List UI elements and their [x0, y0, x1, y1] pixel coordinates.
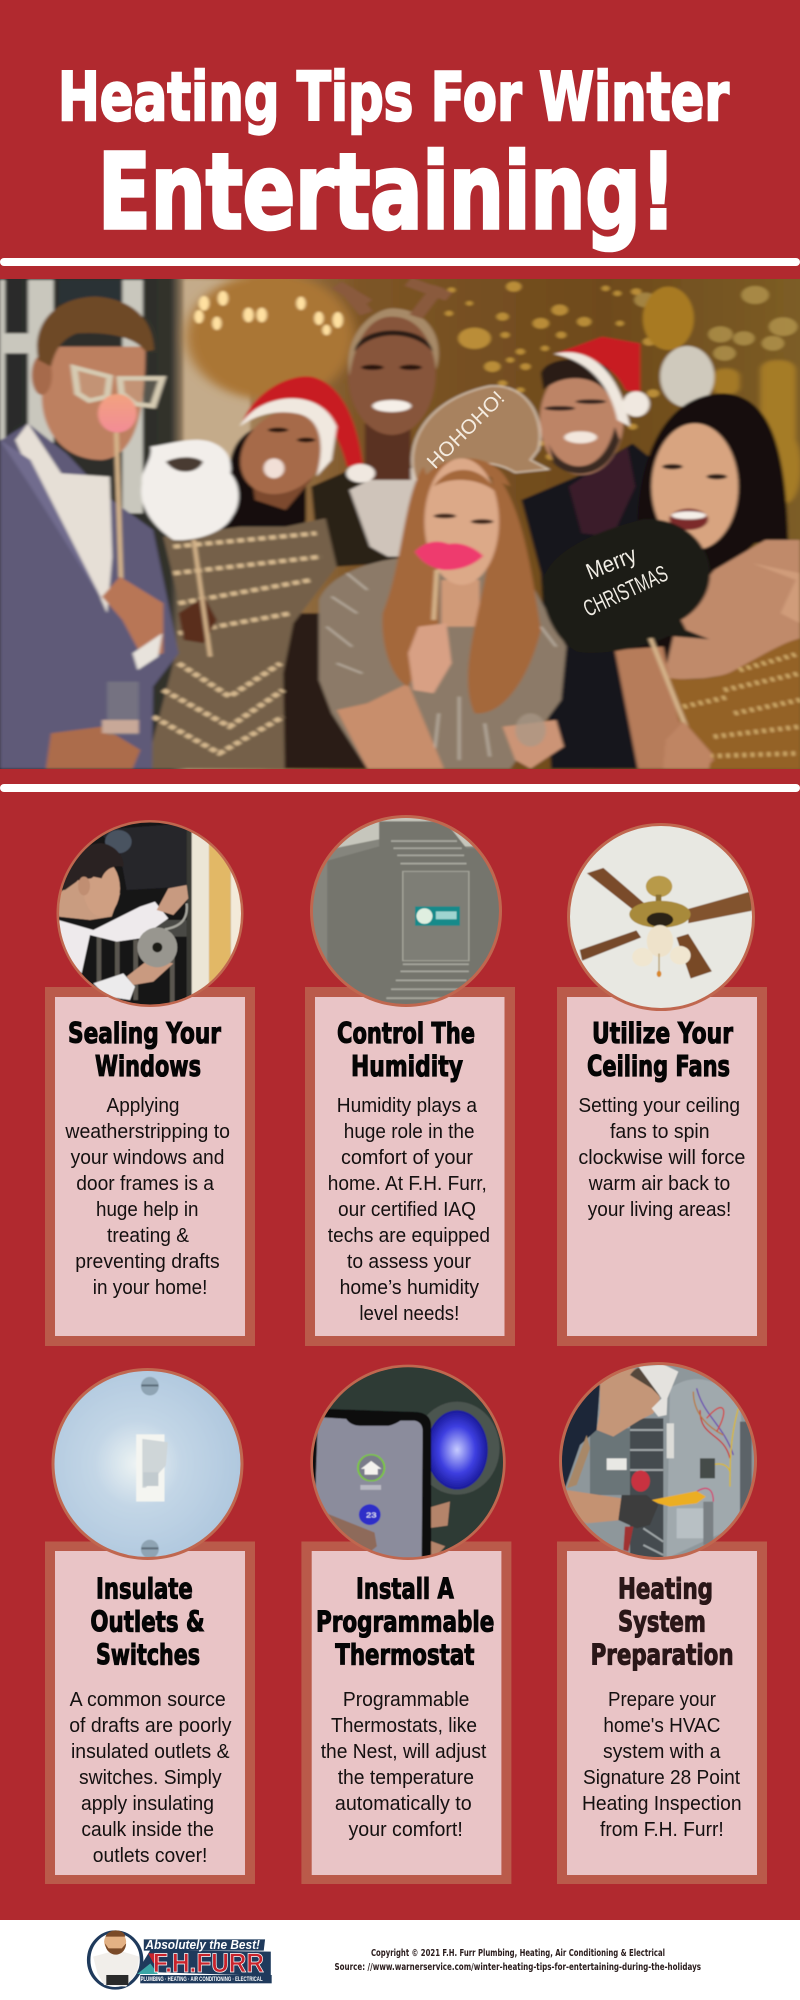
photo: ceiling fan [563, 821, 761, 1014]
blonde woman with lip prop [319, 458, 566, 769]
heading: Switches [96, 1639, 200, 1672]
heading: Thermostat [335, 1639, 474, 1672]
heading [316, 1573, 494, 1672]
heading: Install A [356, 1573, 454, 1606]
photo: technician servicing furnace [557, 1362, 763, 1562]
body text: clockwise will force [578, 1147, 745, 1169]
footer [0, 1920, 800, 2000]
panel: insulate outlets and switches [44, 1360, 255, 1884]
panel: sealing your windows [45, 817, 255, 1346]
heading: Ceiling Fans [587, 1050, 730, 1083]
heading [337, 1017, 475, 1083]
body text: Setting your ceiling [578, 1095, 740, 1117]
body text: warm air back to [588, 1173, 730, 1195]
body text: weatherstripping to [64, 1121, 230, 1143]
photo: party group with props: HOHOHO! [423, 387, 509, 474]
body text: your comfort! [348, 1819, 463, 1841]
body text: home’s humidity [340, 1277, 479, 1299]
heading: Programmable [316, 1606, 494, 1639]
glitter speech bubble HOHOHO [412, 386, 548, 480]
bokeh lights [445, 282, 669, 460]
black speech bubble Merry Christmas [542, 519, 710, 653]
body text: the Nest, will adjust [321, 1741, 487, 1763]
body text: your windows and [71, 1147, 224, 1169]
photo: whole-home humidifier [308, 814, 507, 1011]
windows [0, 280, 143, 513]
body text: treating & [107, 1225, 190, 1247]
heading [591, 1573, 734, 1672]
heading: Insulate [96, 1573, 193, 1606]
body text: in your home! [93, 1277, 207, 1299]
body text: Heating Inspection [582, 1793, 742, 1815]
heading: Utilize Your [592, 1017, 733, 1050]
body text: from F.H. Furr! [600, 1819, 724, 1841]
dark gap between women [281, 612, 368, 769]
body text: apply insulating [81, 1793, 214, 1815]
heading: System [618, 1606, 706, 1639]
body text: Applying [106, 1095, 180, 1117]
body text: our certified IAQ [338, 1199, 476, 1221]
heading [68, 1017, 221, 1083]
body text [328, 1095, 490, 1325]
heading [587, 1017, 733, 1083]
panel: utilize your ceiling fans [557, 821, 767, 1346]
photo: party group with props: Merry [582, 541, 640, 585]
photo: phone and smart thermostat: 23 [366, 1512, 377, 1519]
body text [578, 1095, 745, 1221]
body text: preventing drafts [75, 1251, 220, 1273]
body text: huge help in [96, 1199, 198, 1221]
heading [90, 1573, 205, 1672]
heading: Windows [95, 1050, 201, 1083]
panel: heating system preparation [557, 1362, 767, 1884]
body text [582, 1689, 742, 1841]
chandelier [186, 273, 355, 400]
photo: party group with props [0, 273, 800, 777]
heading: Preparation [591, 1639, 734, 1672]
body text [64, 1095, 230, 1299]
body text: fans to spin [610, 1121, 710, 1143]
woman with dark hair and speech bubble [615, 393, 800, 769]
body text: the temperature [338, 1767, 474, 1789]
body text: Thermostats, like [331, 1715, 477, 1737]
body text: Humidity plays a [337, 1095, 478, 1117]
body text: level needs! [359, 1303, 459, 1325]
panel: install a programmable thermostat [301, 1360, 511, 1884]
body text: A common source [70, 1689, 226, 1711]
heading: Humidity [351, 1050, 463, 1083]
body text: insulated outlets & [71, 1741, 230, 1763]
photo: man applying weatherstripping [53, 817, 247, 1010]
title [58, 58, 729, 253]
body text: your living areas! [588, 1199, 731, 1221]
heading: Sealing Your [68, 1017, 221, 1050]
body text: Signature 28 Point [583, 1767, 740, 1789]
body text [321, 1689, 487, 1841]
body text: techs are equipped [328, 1225, 490, 1247]
photo: phone and smart thermostat [308, 1360, 511, 1564]
body text: to assess your [347, 1251, 471, 1273]
photo: party group with props: CHRISTMAS [579, 560, 672, 622]
heading: Outlets & [90, 1606, 205, 1639]
body text: door frames is a [76, 1173, 215, 1195]
heading: Control The [337, 1017, 475, 1050]
body text: switches. Simply [79, 1767, 222, 1789]
body text [69, 1689, 232, 1867]
body text: automatically to [335, 1793, 472, 1815]
heading: Heating [618, 1573, 713, 1606]
logo: F.H. Furr: Absolutely the Best! [144, 1938, 260, 1952]
logo: F.H. Furr [89, 1930, 272, 1988]
photo: light switch [52, 1368, 244, 1560]
bearded man in santa hat [521, 337, 668, 769]
man with glasses and purple blazer [0, 297, 179, 769]
man in antlers [311, 282, 449, 567]
body text: huge role in the [344, 1121, 474, 1143]
body text: Programmable [343, 1689, 469, 1711]
body text: of drafts are poorly [69, 1715, 232, 1737]
white beard prop [141, 440, 239, 540]
body text: comfort of your [341, 1147, 473, 1169]
logo: F.H. Furr: PLUMBING · HEATING · AIR CONDITIONING · ELECTRICAL [141, 1976, 263, 1983]
body text: caulk inside the [81, 1819, 214, 1841]
panel: control the humidity [305, 814, 515, 1346]
body text: system with a [603, 1741, 721, 1763]
body text: home. At F.H. Furr, [328, 1173, 487, 1195]
woman in santa hat, sequin dress [145, 376, 375, 769]
body text: outlets cover! [93, 1845, 207, 1867]
body text: Prepare your [608, 1689, 716, 1711]
body text: home's HVAC [603, 1715, 720, 1737]
copyright and source: Copyright © 2021 F.H. Furr Plumbing, Heating, Air Conditioning & Electrical [371, 1948, 665, 1959]
copyright and source [334, 1948, 701, 1973]
logo: F.H. Furr: F.H.FURR [153, 1948, 264, 1978]
balloons [643, 287, 694, 350]
